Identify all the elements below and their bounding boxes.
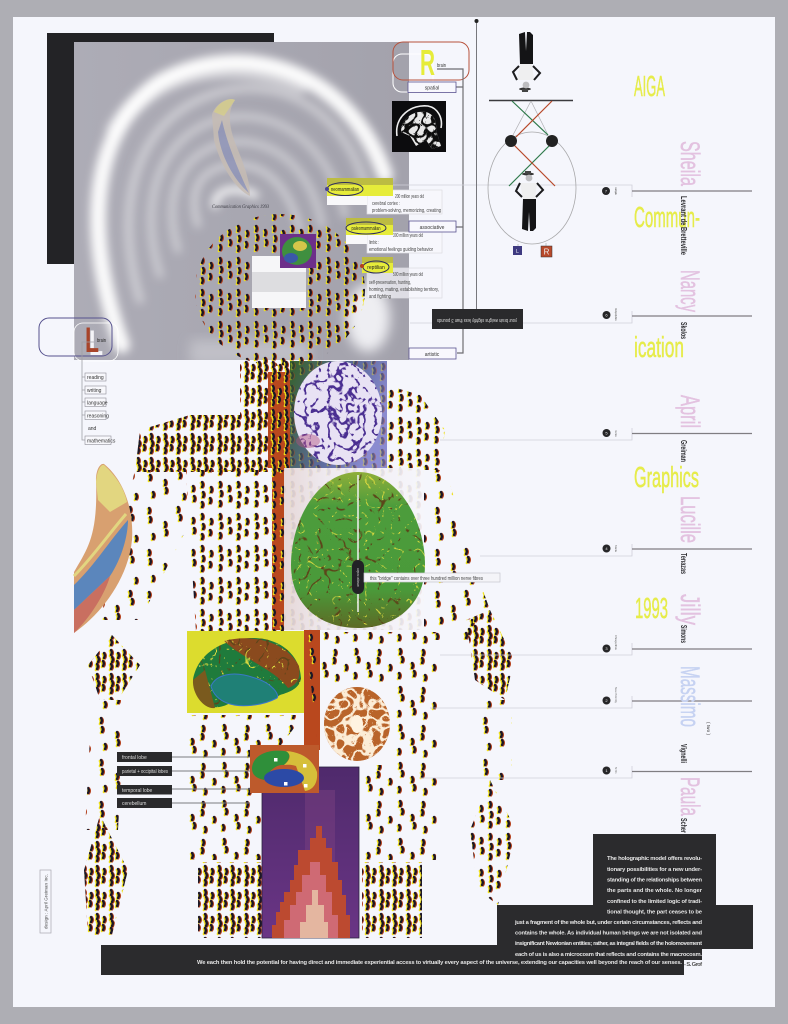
designer city microtext xyxy=(614,187,618,774)
quote panel: holographic model: standing of the relationships between xyxy=(607,878,702,884)
neomammalian text: problem-solving, memorizing, creating xyxy=(372,208,441,214)
image: brown brain cross-section xyxy=(320,685,395,765)
paleomammalian tag xyxy=(346,218,393,244)
neomammalian tag xyxy=(325,178,393,205)
reptilian text xyxy=(367,268,442,300)
quote panel: holographic model: insignificant Newtonian entities; rather, as integral fields of the holomovement xyxy=(515,941,702,947)
paleomammalian text xyxy=(367,232,442,253)
left brain skills list: language xyxy=(87,400,108,406)
quote panel: holographic model xyxy=(101,834,753,975)
image: purple brain xyxy=(290,361,387,468)
R brain label: R xyxy=(420,42,435,83)
L and R eye markers: R xyxy=(544,248,550,256)
designer first names: Sheila xyxy=(675,141,705,187)
L brain label xyxy=(39,318,118,363)
image: purple thermal flame xyxy=(262,767,359,938)
black offset rectangle xyxy=(47,33,274,264)
label: artistic: artistic xyxy=(425,352,440,358)
R brain label: brain xyxy=(437,63,446,69)
designer city microtext: Venice xyxy=(614,430,618,437)
designer first names: April xyxy=(675,395,705,428)
small note: ( two ) xyxy=(706,722,711,736)
image: colour-coded lobes brain xyxy=(250,745,319,793)
left brain skills list: writing xyxy=(87,388,102,394)
orange blocks behind body xyxy=(268,372,320,750)
numbered designer markers: 3 xyxy=(605,646,608,651)
callout: bridge nerve fibres xyxy=(364,573,500,582)
title: AIGA Communication Graphics 1993: Commun- xyxy=(634,202,700,234)
title: AIGA Communication Graphics 1993: AIGA xyxy=(634,71,665,103)
image: green brain top view with bridge xyxy=(284,468,425,630)
reptilian text: 500 million years old xyxy=(393,272,423,278)
quote panel: holographic model: contains the whole. As individual human beings we are not isolated and xyxy=(515,930,702,936)
vertical axis with end dot xyxy=(474,19,478,310)
heavy right-hand rules xyxy=(632,191,752,772)
brain lobe labels: frontal lobe xyxy=(122,755,147,761)
quote panel: holographic model: The holographic model offers revolu- xyxy=(607,856,702,862)
numbered designer markers: 6 xyxy=(605,312,608,318)
left brain skills list: reasoning xyxy=(87,414,109,420)
label: associative: associative xyxy=(420,225,445,231)
designer city microtext: Chicago, Illinois xyxy=(614,635,618,650)
title: AIGA Communication Graphics 1993 xyxy=(634,71,700,625)
quote panel: holographic model: the parts and the whole. No longer xyxy=(607,888,703,894)
designer city microtext: Manila xyxy=(614,545,618,552)
reptilian tag: reptilian xyxy=(367,265,385,271)
image: MRI head scan xyxy=(392,101,446,152)
icon: fish in photo xyxy=(212,99,250,196)
image: green brain top view with bridge: corpus callosum xyxy=(356,568,360,587)
white window in head xyxy=(252,256,306,308)
L brain label: L xyxy=(85,321,99,360)
designer first names: Lucille xyxy=(675,496,705,543)
neomammalian tag: neomammalian xyxy=(331,187,359,193)
designer first names: Nancy xyxy=(675,270,705,312)
R brain label xyxy=(393,42,469,92)
thin horizontal leader lines xyxy=(327,185,632,778)
numbered designer markers: 7 xyxy=(605,188,608,194)
title: AIGA Communication Graphics 1993: ication xyxy=(634,332,684,364)
quote panel: holographic model: just a fragment of the whole but, under certain circumstances, reflects and xyxy=(514,920,702,926)
brain lobe labels: temporal lobe xyxy=(122,788,153,794)
designer surnames: Tenazas xyxy=(679,553,688,574)
quote panel: holographic model: - S. Grof xyxy=(684,962,702,968)
reptilian tag xyxy=(360,257,393,273)
designer city microtext: Los Angeles xyxy=(614,187,618,195)
photo caption: Communication Graphics 1993 xyxy=(212,204,269,210)
right brain connector lines xyxy=(437,69,463,353)
quote panel: holographic model: tional thought, the part ceases to be xyxy=(607,910,703,916)
icon: upright man xyxy=(516,171,543,231)
designer city microtext: N.Y.C. xyxy=(614,767,618,774)
left brain skills list: mathematics xyxy=(87,438,116,444)
paleomammalian text: 300 million years old xyxy=(393,233,423,239)
numbered designer markers: 4 xyxy=(605,546,608,551)
reptilian text: homing, mating, establishing territory, xyxy=(369,287,439,293)
quote panel: holographic model: confined to the limited logic of tradi- xyxy=(607,899,702,905)
brain lobe labels: parietal + occipital lobes xyxy=(122,769,168,775)
icon: large fish on left xyxy=(74,464,132,633)
label: artistic xyxy=(409,348,456,359)
designer surnames: Greiman xyxy=(679,440,688,462)
numbered designer markers: 5 xyxy=(605,430,608,436)
paleomammalian text: limbic : xyxy=(369,240,379,246)
L brain label: L xyxy=(89,324,103,363)
quote panel: holographic model: each of us is also a microcosm that reflects and contains the macrocosm. xyxy=(515,952,702,958)
left brain skills list: reading xyxy=(87,375,104,381)
small purple brain in head xyxy=(280,234,316,268)
designer surnames: Scher xyxy=(679,818,688,833)
label: spatial xyxy=(408,82,456,92)
callout: brain weight, upside-down xyxy=(432,309,523,329)
quote panel: holographic model: We each then hold the potential for having direct and immediate experiential access to virtually every aspect of the universe, extending our capacities well beyond the reach of our senses. xyxy=(197,960,682,966)
designer surnames: Levrant de Bretteville xyxy=(679,196,688,255)
numbered designer markers: 1 xyxy=(605,768,608,773)
L brain label: brain xyxy=(97,338,106,344)
numbered designer markers xyxy=(602,187,610,774)
left brain skills list: and xyxy=(88,426,97,432)
eye diagram: image and lens paths xyxy=(488,100,576,247)
designer surnames xyxy=(679,196,688,833)
left brain skills list xyxy=(82,342,116,444)
paleomammalian tag: paleomammalian xyxy=(352,226,381,232)
swirl photo panel xyxy=(74,42,409,365)
reptilian text: self-preservation, hunting, xyxy=(369,280,411,286)
designer first names: Massimo xyxy=(675,666,705,727)
designer first names xyxy=(675,141,705,817)
brain lobe labels: cerebellum xyxy=(122,801,146,807)
paleomammalian text: emotional feelings guiding behavior xyxy=(369,247,433,253)
chart: holographic dot-figure body xyxy=(84,214,516,938)
neomammalian text: 200 million years old xyxy=(395,194,424,200)
designer city microtext: Rockport, Maine xyxy=(614,308,618,321)
designer city microtext: New York City xyxy=(614,687,618,704)
vertical design credit: design : April Greiman Inc. xyxy=(44,874,48,929)
neomammalian text xyxy=(367,190,442,214)
L and R eye markers xyxy=(513,246,552,257)
designer surnames: Simons xyxy=(679,625,688,643)
label: associative xyxy=(409,221,456,232)
callout: bridge nerve fibres: this "bridge" contains over three hundred million nerve fibres xyxy=(370,576,483,582)
icon: upside-down man xyxy=(513,32,540,92)
numbered designer markers: 2 xyxy=(605,698,608,703)
image: side-view brain on yellow xyxy=(187,631,304,713)
label: spatial: spatial xyxy=(425,86,439,92)
brain lobe labels xyxy=(117,752,250,808)
designer surnames: Skolos xyxy=(679,322,688,339)
L and R eye markers: L xyxy=(516,249,519,255)
designer surnames: Vignelli xyxy=(679,744,688,763)
title: AIGA Communication Graphics 1993: 1993 xyxy=(635,593,668,625)
neomammalian text: cerebral cortex : xyxy=(372,201,400,207)
callout: brain weight, upside-down: your brain weighs slightly less than 3 pounds xyxy=(437,317,517,323)
designer first names: Jilly xyxy=(675,594,705,625)
reptilian text: and fighting xyxy=(369,294,391,300)
title: AIGA Communication Graphics 1993: Graphics xyxy=(634,462,699,494)
designer first names: Paula xyxy=(675,777,705,817)
quote panel: holographic model: tionary possibilities for a new under- xyxy=(607,867,702,873)
vertical design credit xyxy=(40,870,51,933)
